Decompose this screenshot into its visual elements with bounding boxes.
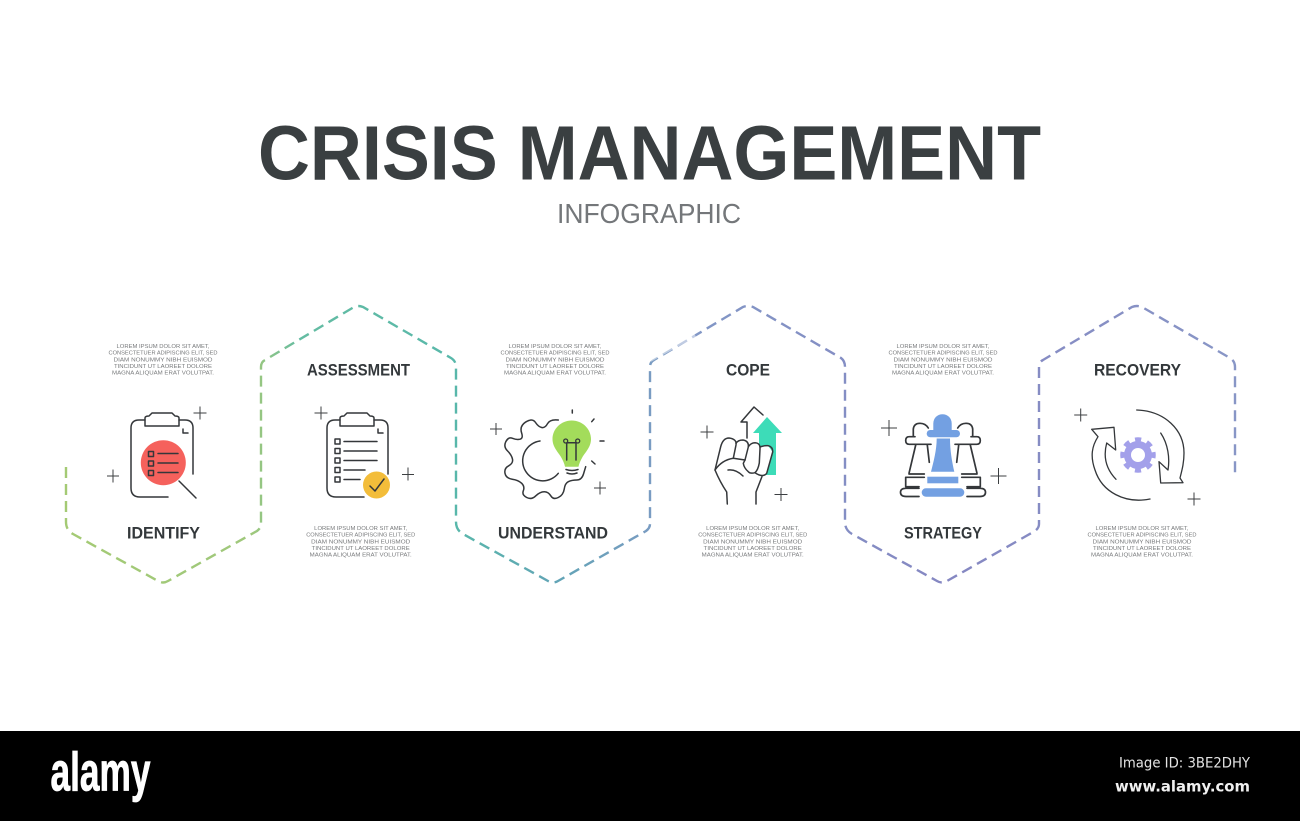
website: www.alamy.com — [1115, 778, 1250, 796]
text block: cope description: MAGNA ALIQUAM ERAT VOLUTPAT. — [702, 553, 804, 559]
text block: recovery description: MAGNA ALIQUAM ERAT VOLUTPAT. — [1091, 553, 1193, 559]
text block: cope description: LOREM IPSUM DOLOR SIT AMET, — [706, 526, 800, 532]
text block: understand description: LOREM IPSUM DOLOR SIT AMET, — [508, 344, 602, 350]
text block: identify description: LOREM IPSUM DOLOR SIT AMET, — [116, 344, 210, 350]
text block: understand description: DIAM NONUMMY NIBH EUISMOD — [506, 357, 604, 363]
footer bar — [0, 731, 1300, 821]
footer logo: alamy — [50, 741, 151, 803]
label: cope: COPE — [726, 362, 770, 380]
text block: assessment description: CONSECTETUER ADIPISCING ELIT, SED — [306, 533, 415, 539]
step: strategy — [881, 344, 1006, 542]
text block: assessment description: LOREM IPSUM DOLOR SIT AMET, — [314, 526, 408, 532]
text block: understand description — [500, 344, 610, 377]
label: assessment: ASSESSMENT — [307, 362, 410, 380]
label: understand: UNDERSTAND — [498, 524, 608, 542]
text block: identify description: MAGNA ALIQUAM ERAT VOLUTPAT. — [112, 371, 214, 377]
text block: understand description: TINCIDUNT UT LAOREET DOLORE — [506, 364, 604, 370]
text block: recovery description: LOREM IPSUM DOLOR SIT AMET, — [1096, 526, 1189, 532]
text block: identify description: DIAM NONUMMY NIBH EUISMOD — [114, 357, 212, 363]
text block: identify description — [108, 344, 218, 377]
text block: cope description — [698, 526, 807, 559]
label: recovery: RECOVERY — [1094, 362, 1181, 380]
text block: recovery description: CONSECTETUER ADIPISCING ELIT, SED — [1088, 533, 1196, 539]
text block: strategy description: CONSECTETUER ADIPISCING ELIT, SED — [888, 351, 998, 357]
icon: raised fist with arrows — [700, 407, 788, 504]
text block: cope description: TINCIDUNT UT LAOREET DOLORE — [704, 546, 802, 552]
text block: recovery description: TINCIDUNT UT LAOREET DOLORE — [1093, 546, 1191, 552]
step: cope — [698, 362, 807, 559]
text block: strategy description: DIAM NONUMMY NIBH EUISMOD — [894, 357, 992, 363]
label: strategy: STRATEGY — [904, 524, 982, 542]
text block: strategy description: MAGNA ALIQUAM ERAT VOLUTPAT. — [892, 371, 994, 377]
icon: clipboard with magnifier — [107, 406, 206, 498]
title: CRISIS MANAGEMENT — [258, 110, 1041, 196]
text block: cope description: DIAM NONUMMY NIBH EUISMOD — [703, 539, 802, 545]
text block: assessment description: DIAM NONUMMY NIBH EUISMOD — [311, 539, 410, 545]
text block: understand description: CONSECTETUER ADIPISCING ELIT, SED — [500, 351, 610, 357]
label: identify: IDENTIFY — [127, 524, 200, 542]
text block: understand description: MAGNA ALIQUAM ERAT VOLUTPAT. — [504, 371, 606, 377]
text block: strategy description: TINCIDUNT UT LAOREET DOLORE — [894, 364, 992, 370]
step: understand — [490, 344, 610, 542]
step: recovery — [1074, 362, 1200, 559]
icon: circular arrows with gear — [1074, 408, 1200, 506]
image id: Image ID: 3BE2DHY — [1119, 756, 1250, 772]
icon: checklist clipboard — [314, 406, 414, 498]
text block: identify description: CONSECTETUER ADIPISCING ELIT, SED — [108, 351, 218, 357]
text block: assessment description — [306, 526, 415, 559]
dashed hexagon chain — [66, 306, 1235, 582]
text block: strategy description: LOREM IPSUM DOLOR SIT AMET, — [896, 344, 990, 350]
text block: identify description: TINCIDUNT UT LAOREET DOLORE — [114, 364, 212, 370]
subtitle: INFOGRAPHIC — [557, 198, 741, 229]
text block: strategy description — [888, 344, 998, 377]
text block: recovery description — [1088, 526, 1196, 559]
step: assessment — [306, 362, 415, 559]
text block: recovery description: DIAM NONUMMY NIBH EUISMOD — [1092, 539, 1192, 545]
text block: assessment description: TINCIDUNT UT LAOREET DOLORE — [312, 546, 410, 552]
text block: assessment description: MAGNA ALIQUAM ERAT VOLUTPAT. — [310, 553, 412, 559]
step: identify — [107, 344, 218, 542]
icon: gear and light bulb — [490, 410, 606, 498]
text block: cope description: CONSECTETUER ADIPISCING ELIT, SED — [698, 533, 807, 539]
icon: chess pieces — [881, 414, 1006, 497]
